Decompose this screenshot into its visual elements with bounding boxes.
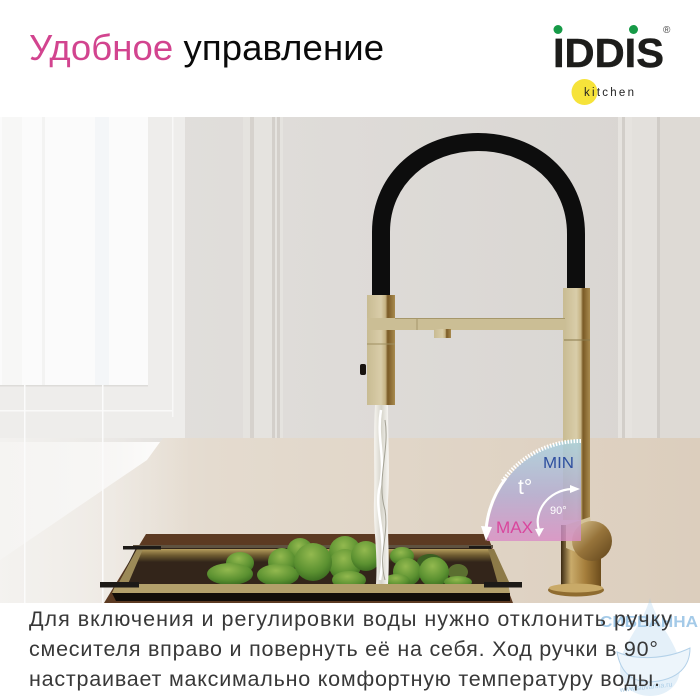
logo wordmark: IDDIS	[553, 30, 664, 76]
logo green dots	[554, 25, 638, 34]
text line 2: смесителя вправо и повернуть её на себя. Ход ручки в 90°	[29, 637, 658, 661]
description text	[29, 607, 672, 691]
kitchen label: kitchen	[584, 87, 634, 99]
faucet base and handle	[548, 517, 612, 596]
inner 90 degree arrow	[535, 485, 580, 537]
title: Удобное управление	[29, 27, 384, 68]
watermark drop	[620, 598, 680, 696]
feijoa fruits	[207, 536, 472, 589]
label 90 degrees: 90°	[550, 505, 567, 517]
outer arrow	[481, 478, 506, 541]
tray handles	[100, 546, 522, 588]
watermark name: СИБВАННА	[600, 614, 698, 631]
sector fill	[487, 439, 581, 541]
logo: IDDIS kitchen	[553, 25, 671, 105]
tray right side	[488, 549, 510, 584]
wall	[48, 117, 618, 442]
label MIN: MIN	[543, 455, 574, 472]
lower cylinder	[561, 525, 601, 587]
black flexible hose	[381, 142, 576, 298]
photo: kitchen scene	[0, 117, 700, 603]
registered mark: ®	[663, 25, 671, 36]
watermark bath	[617, 648, 690, 682]
horizontal arm	[395, 319, 563, 330]
spray head	[367, 295, 395, 405]
wall mouldings	[250, 117, 660, 438]
water stream	[374, 405, 389, 584]
label t degrees: t°	[518, 476, 532, 499]
arm nub	[434, 329, 451, 338]
tray back wall	[134, 549, 495, 562]
sink with tray	[100, 534, 522, 603]
tray back rim	[133, 545, 493, 548]
label MAX: MAX	[496, 519, 533, 537]
handle neck	[566, 517, 590, 552]
wooden sink edge	[104, 534, 513, 603]
text line 3: настраивает максимально комфортную температуру воды.	[29, 667, 660, 691]
temperature sector diagram	[481, 439, 581, 541]
watermark	[600, 598, 698, 696]
faucet	[360, 142, 590, 520]
base plate	[548, 584, 604, 596]
spray button	[360, 364, 366, 375]
faucet body column	[563, 288, 590, 520]
tray front rim	[112, 584, 510, 593]
text line 1: Для включения и регулировки воды нужно отклонить ручку	[29, 607, 672, 631]
curtain	[0, 117, 190, 603]
kitchen yellow circle	[572, 79, 598, 105]
handle disc	[572, 521, 612, 561]
tray left side	[119, 550, 142, 582]
watermark url: www.sibvanna.ru	[618, 681, 673, 694]
sector tick edge	[502, 441, 581, 482]
counter top	[0, 438, 700, 603]
tray interior	[118, 546, 508, 584]
